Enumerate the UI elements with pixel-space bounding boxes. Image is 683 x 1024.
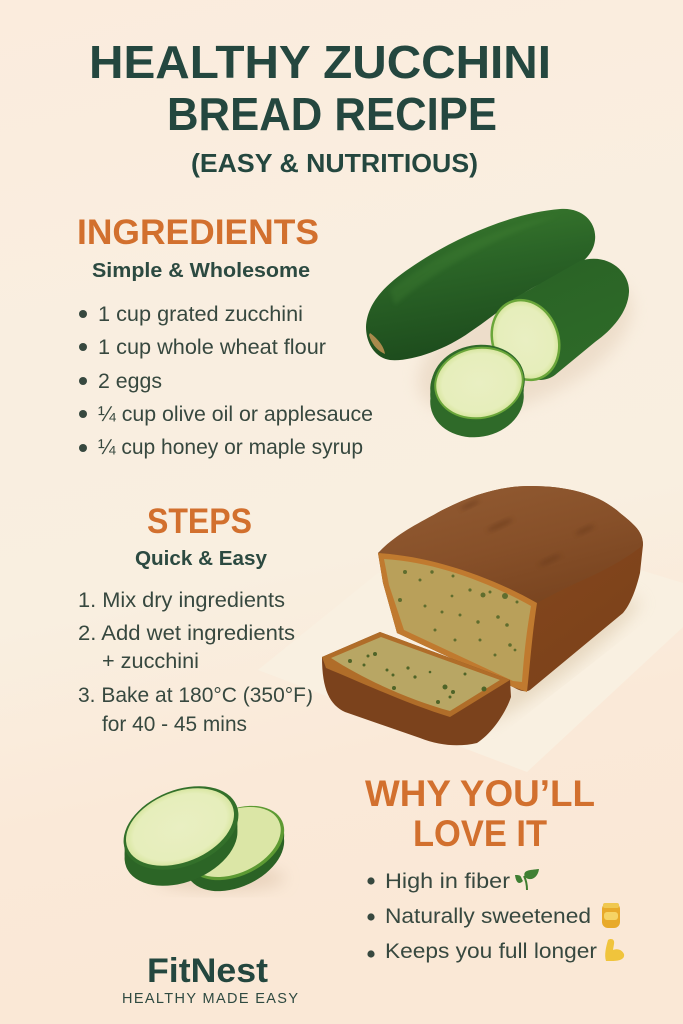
benefits list: High in fiber <box>385 870 510 893</box>
title <box>89 36 551 178</box>
title: (EASY & NUTRITIOUS) <box>191 148 478 178</box>
steps list: for 40 - 45 mins <box>102 713 247 736</box>
panel: steps <box>78 502 313 736</box>
icon: flexed arm <box>605 939 624 961</box>
benefits list: Naturally sweetened <box>385 905 591 928</box>
icon: seedling <box>515 869 539 890</box>
panel: ingredients <box>77 213 373 459</box>
steps list: 3. Bake at 180°C (350°F) <box>78 684 313 707</box>
title: HEALTHY ZUCCHINI <box>89 36 551 88</box>
steps list: 1. Mix dry ingredients <box>78 589 285 612</box>
panel: why you'll love it <box>365 773 624 963</box>
illustration: zucchini <box>366 209 652 445</box>
illustration: zucchini bread loaf <box>258 486 683 772</box>
cut face <box>378 553 537 692</box>
benefits list <box>367 870 597 963</box>
benefits list: Keeps you full longer <box>385 940 597 963</box>
steps list: + zucchini <box>102 650 199 673</box>
whole zucchini <box>366 209 595 360</box>
bread slice <box>322 632 511 745</box>
why heading <box>365 773 595 854</box>
cut zucchini <box>513 259 629 380</box>
brand logo <box>122 952 298 1007</box>
why heading: LOVE IT <box>413 813 547 854</box>
ingredients list: ¼ cup honey or maple syrup <box>98 436 363 459</box>
steps list <box>78 589 313 736</box>
zucchini round slice <box>424 340 530 445</box>
ingredients list: 2 eggs <box>98 370 162 393</box>
ingredients list <box>79 303 373 459</box>
parchment paper <box>258 570 683 772</box>
front slice <box>111 770 251 901</box>
icon: honey jar <box>602 903 620 928</box>
steps heading: STEPS <box>147 502 252 541</box>
title: BREAD RECIPE <box>167 88 497 140</box>
ingredients list: 1 cup whole wheat flour <box>98 336 326 359</box>
back slice <box>174 791 296 906</box>
steps list: 2. Add wet ingredients <box>78 622 295 645</box>
brand logo: HEALTHY MADE EASY <box>122 991 298 1007</box>
loaf top crust <box>378 486 643 603</box>
illustration: zucchini slices <box>111 770 296 906</box>
ingredients subheading: Simple & Wholesome <box>92 260 310 282</box>
brand logo: FitNest <box>147 952 268 990</box>
ingredients list: ¼ cup olive oil or applesauce <box>98 403 373 426</box>
why heading: WHY YOU’LL <box>365 773 595 814</box>
steps subheading: Quick & Easy <box>135 548 268 570</box>
loaf body <box>378 486 643 691</box>
ingredients heading: INGREDIENTS <box>77 213 319 252</box>
ingredients list: 1 cup grated zucchini <box>98 303 303 326</box>
